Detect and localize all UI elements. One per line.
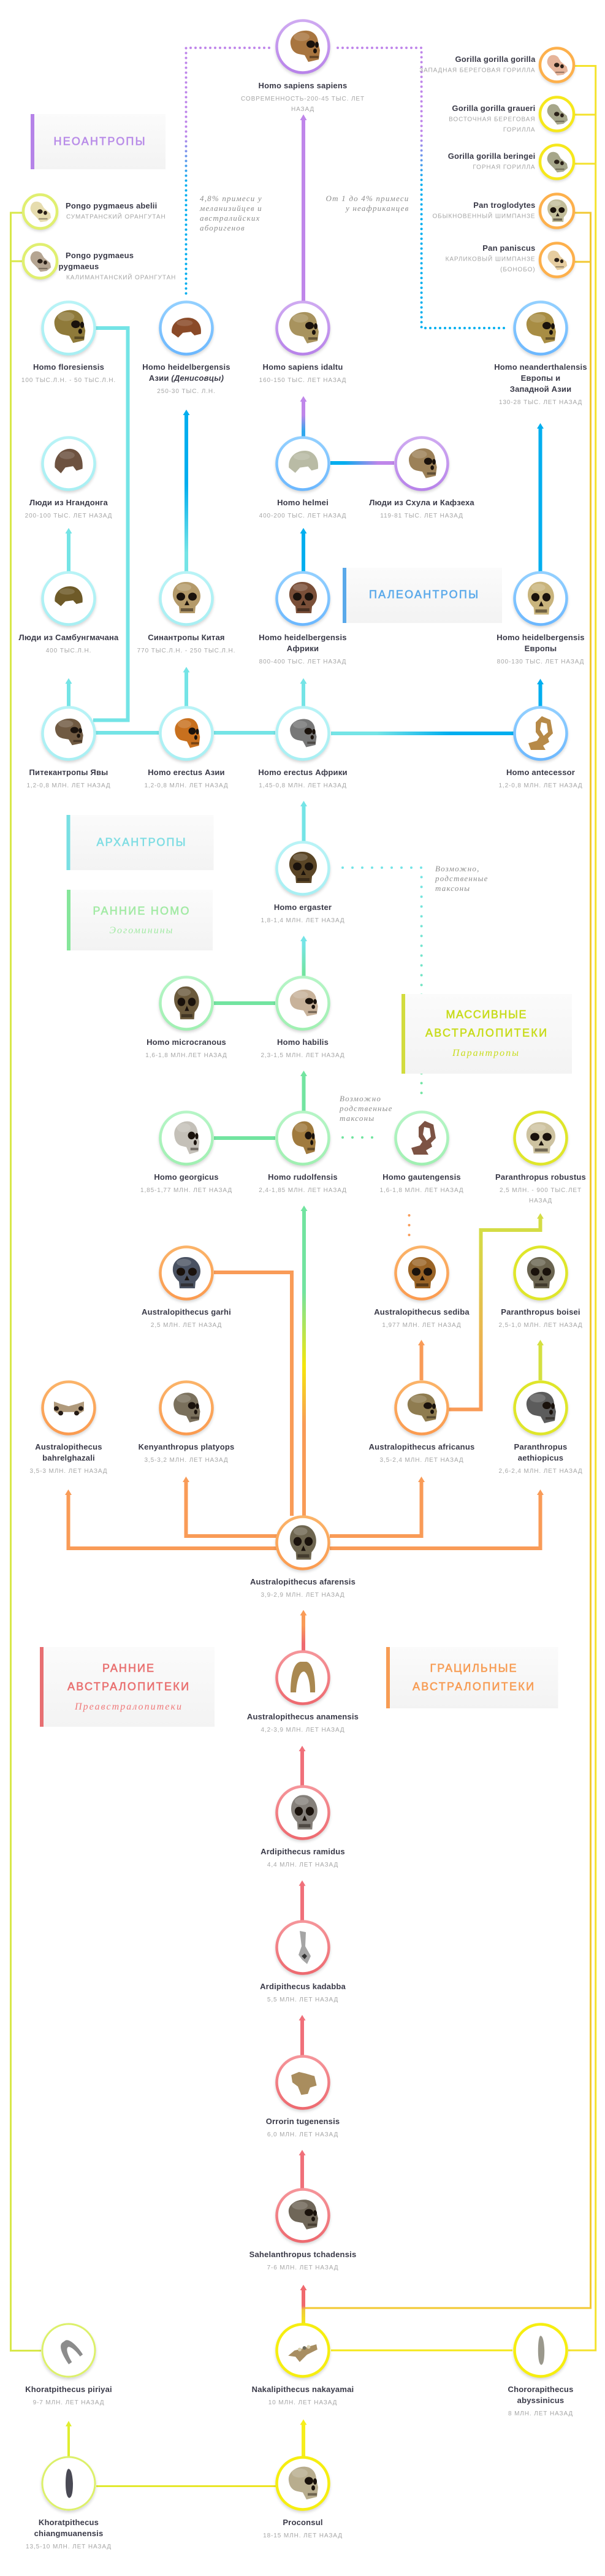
skull icon: [289, 582, 317, 613]
skull icon: [547, 152, 568, 172]
node: Khoratpithecus chiangmuanensis: [26, 2456, 112, 2550]
node: Proconsul: [263, 2456, 343, 2539]
connector: georgicus to rudolfensis: [214, 1136, 275, 1140]
date: 5,5 МЛН. ЛЕТ НАЗАД: [267, 1997, 338, 2003]
note: possibly related taxa near rudolfensis: родственные: [339, 1104, 393, 1113]
name: Australopithecus africanus: [369, 1442, 474, 1451]
connector: Java to erectus Asia: [96, 731, 159, 735]
arrow: anamensis to afarensis: [300, 1610, 306, 1651]
arrow: habilis to ergaster: [300, 936, 307, 976]
skull icon: [31, 202, 51, 222]
node: Khoratpithecus piriyai: [25, 2323, 112, 2406]
date: 1,2-0,8 МЛН. ЛЕТ НАЗАД: [144, 782, 229, 789]
name: Homo floresiensis: [33, 362, 104, 372]
name: Homo georgicus: [154, 1172, 219, 1182]
skull icon: [172, 318, 201, 337]
node: Ardipithecus ramidus: [261, 1786, 345, 1868]
skull icon: [547, 199, 568, 222]
connector: microcranous to habilis: [214, 1001, 275, 1005]
panel: early australopithecines: АВСТРАЛОПИТЕКИ: [67, 1680, 189, 1692]
arrow: sahelanthropus to orrorin: [299, 2150, 305, 2188]
name: Homo neanderthalensis: [494, 362, 587, 372]
date: НАЗАД: [529, 1198, 552, 1204]
date: 3,9-2,9 МЛН. ЛЕТ НАЗАД: [261, 1592, 345, 1599]
node: Chororapithecus abyssinicus: [508, 2323, 574, 2417]
skull icon: [291, 31, 320, 62]
name: Homo microcranous: [146, 1038, 226, 1047]
note: possibly related taxa near rudolfensis: Возможно: [340, 1094, 381, 1103]
name: Homo ergaster: [274, 903, 332, 912]
node: Homo heidelbergensis Asia: [142, 300, 230, 395]
name: Pan troglodytes: [473, 201, 536, 210]
date: 2,5 МЛН. - 900 ТЫС.ЛЕТ: [500, 1187, 582, 1194]
name: Африки: [287, 644, 319, 653]
panel: early Homo: Эогоминины: [109, 925, 173, 936]
skull icon: [527, 312, 556, 343]
name: Homo erectus Азии: [148, 768, 225, 777]
node: Paranthropus boisei: [498, 1246, 583, 1329]
node: Homo sapiens idaltu: [259, 300, 346, 384]
date: 1,6-1,8 МЛН. ЛЕТ НАЗАД: [379, 1187, 464, 1194]
arrow: idaltu to sapiens: [300, 114, 306, 301]
node: Nakalipithecus nakayamai: [252, 2323, 354, 2406]
date: 119-81 ТЫС. ЛЕТ НАЗАД: [380, 513, 463, 519]
arrow: africanus to robustus: [448, 1213, 544, 1409]
name: bahrelghazali: [42, 1453, 95, 1462]
skull icon: [408, 1257, 436, 1288]
arrow: africanus to sediba: [418, 1340, 425, 1380]
arrow: afarensis to platyops: [183, 1477, 277, 1536]
name: Gorilla gorilla gorilla: [455, 55, 536, 64]
date: КАЛИМАНТАНСКИЙ ОРАНГУТАН: [66, 273, 176, 281]
skull icon: [290, 990, 318, 1016]
name: Homo sapiens sapiens: [259, 81, 347, 90]
date: 3,5-3 МЛН. ЛЕТ НАЗАД: [30, 1468, 107, 1475]
name: Pongo pygmaeus abelii: [66, 201, 157, 210]
date: 7-6 МЛН. ЛЕТ НАЗАД: [267, 2265, 338, 2271]
name: Paranthropus boisei: [501, 1307, 580, 1317]
connector: erectus Africa to antecessor: [331, 732, 514, 735]
skull icon: [291, 1795, 318, 1830]
node: Homo neanderthalensis: [494, 300, 587, 406]
dotted line: rudolfensis to gautengensis: [343, 1136, 382, 1139]
name: Homo heidelbergensis: [259, 633, 347, 642]
name: Homo erectus Африки: [258, 768, 348, 777]
note: possibly related taxa near ergaster: Возможно,: [435, 864, 480, 873]
node: Sambungmacan people: [19, 571, 119, 654]
name: Pongo pygmaeus: [66, 251, 134, 260]
date: 770 ТЫС.Л.Н. - 250 ТЫС.Л.Н.: [137, 648, 235, 654]
arrow: erectus Asia to sinanthropus: [183, 667, 190, 706]
skull icon: [411, 1121, 436, 1155]
panel: early Homo: [67, 890, 213, 950]
note: 1 to 4% admixture: у неафриканцев: [344, 204, 409, 213]
dotted line: Denisovan admixture: [186, 48, 269, 294]
date: ГОРНАЯ ГОРИЛЛА: [473, 164, 536, 170]
skull icon: [291, 1662, 315, 1692]
name: Nakalipithecus nakayamai: [252, 2385, 354, 2394]
skull icon: [173, 582, 200, 613]
skull icon: [175, 718, 200, 748]
arrow: aethiopicus to boisei: [537, 1340, 544, 1380]
connector: erectus Asia to Africa: [214, 731, 275, 735]
node: Homo erectus Asia: [144, 706, 229, 789]
name: Homo antecessor: [506, 768, 575, 777]
name: chiangmuanensis: [34, 2529, 103, 2538]
skull icon: [31, 251, 51, 272]
connector: left orangutan line: [11, 213, 41, 2351]
name: Gorilla gorilla beringei: [448, 151, 536, 161]
date: 3,5-2,4 МЛН. ЛЕТ НАЗАД: [379, 1457, 464, 1464]
skull icon: [538, 2336, 544, 2365]
date: 200-100 ТЫС. ЛЕТ НАЗАД: [25, 513, 112, 519]
date: 160-150 ТЫС. ЛЕТ НАЗАД: [259, 377, 346, 384]
skull icon: [289, 312, 319, 343]
name: aethiopicus: [518, 1453, 563, 1462]
date: 4,2-3,9 МЛН. ЛЕТ НАЗАД: [261, 1727, 345, 1733]
name: Homo habilis: [277, 1038, 329, 1047]
skull icon: [527, 1257, 555, 1288]
dotted line: sediba to gautengensis: [408, 1206, 411, 1235]
arrow: afarensis to bahrelghazali: [65, 1489, 277, 1548]
panel: early australopithecines: Преавстралопитеки: [74, 1702, 181, 1712]
date: НАЗАД: [291, 106, 314, 113]
node: Paranthropus aethiopicus: [498, 1381, 583, 1475]
name: pygmaeus: [59, 262, 99, 271]
node: Homo habilis: [261, 976, 345, 1059]
arrow: Sambungmacan to Ngandong: [65, 528, 72, 571]
date: 400 ТЫС.Л.Н.: [46, 648, 91, 654]
node: Homo erectus Africa: [258, 706, 348, 789]
date: ЗАПАДНАЯ БЕРЕГОВАЯ ГОРИЛЛА: [419, 67, 536, 74]
date: 10 МЛН. ЛЕТ НАЗАД: [268, 2399, 337, 2406]
panel: archanthropes: [66, 815, 213, 870]
panel: early Homo: РАННИЕ HOMO: [93, 905, 189, 917]
name: Западной Азии: [510, 384, 571, 394]
panel: robust australopithecines: [401, 994, 572, 1074]
skull icon: [290, 719, 316, 747]
name: Синантропы Китая: [148, 633, 225, 642]
name: Homo rudolfensis: [268, 1172, 338, 1182]
node: Kenyanthropus platyops: [139, 1381, 234, 1464]
panel: paleoanthropes: ПАЛЕОАНТРОПЫ: [369, 589, 478, 601]
node: Java Pithecanthropus: [26, 706, 111, 789]
arrow: rudolfensis to habilis: [300, 1071, 307, 1111]
panel: gracile australopithecines: ГРАЦИЛЬНЫЕ: [430, 1662, 516, 1674]
date: 2,6-2,4 МЛН. ЛЕТ НАЗАД: [498, 1468, 583, 1475]
name: Sahelanthropus tchadensis: [249, 2250, 356, 2259]
name: Kenyanthropus platyops: [139, 1442, 234, 1451]
connector: chimpanzee line: [305, 213, 591, 2308]
skull icon: [289, 2467, 318, 2499]
date: ГОРИЛЛА: [503, 126, 536, 134]
arrow: proconsul to nakalipithecus: [300, 2420, 306, 2456]
connector: nakalipithecus to chororapithecus: [331, 2350, 512, 2351]
name: Homo heidelbergensis: [142, 362, 230, 372]
node: Gorilla gorilla beringei: [448, 144, 575, 180]
node: Australopithecus afarensis: [250, 1516, 356, 1599]
date: (БОНОБО): [500, 266, 536, 273]
name: Orrorin tugenensis: [266, 2117, 340, 2126]
node: Gorilla gorilla gorilla: [419, 47, 575, 83]
date: 1,6-1,8 МЛН.ЛЕТ НАЗАД: [145, 1052, 227, 1059]
node: Ardipithecus kadabba: [260, 1921, 346, 2003]
note: 1 to 4% admixture: От 1 до 4% примеси: [326, 194, 409, 203]
skull icon: [290, 1525, 316, 1560]
name: Homo gautengensis: [382, 1172, 461, 1182]
name: Khoratpithecus: [39, 2518, 99, 2527]
name: Ardipithecus kadabba: [260, 1982, 346, 1991]
note: possibly related taxa near ergaster: родственные: [435, 874, 489, 883]
date: СОВРЕМЕННОСТЬ-200-45 ТЫС. ЛЕТ: [241, 96, 365, 102]
date: 2,3-1,5 МЛН. ЛЕТ НАЗАД: [261, 1052, 345, 1059]
panel: robust australopithecines: АВСТРАЛОПИТЕКИ: [425, 1026, 547, 1039]
arrow: kadabba to ramidus: [299, 1880, 305, 1921]
node: Australopithecus sediba: [374, 1246, 470, 1329]
dotted line: ergaster relatives: [343, 868, 422, 1101]
date: 250-30 ТЫС. Л.Н.: [157, 388, 216, 395]
node: Orrorin tugenensis: [266, 2055, 340, 2138]
name: Homo helmei: [277, 498, 329, 507]
panel: robust australopithecines: Парантропы: [452, 1048, 519, 1058]
date: 400-200 ТЫС. ЛЕТ НАЗАД: [259, 513, 346, 519]
date: 13,5-10 МЛН. ЛЕТ НАЗАД: [26, 2544, 112, 2550]
node: Homo antecessor: [498, 706, 583, 789]
date: 1,45-0,8 МЛН. ЛЕТ НАЗАД: [259, 782, 347, 789]
skull icon: [527, 1122, 555, 1153]
node: Homo helmei: [259, 437, 346, 519]
skull icon: [289, 852, 317, 883]
node: Homo floresiensis: [21, 300, 116, 384]
node: Homo heidelbergensis Africa: [259, 571, 347, 665]
node: Homo gautengensis: [379, 1111, 464, 1194]
arrow: helmei to idaltu: [300, 396, 306, 437]
skull icon: [173, 1257, 200, 1288]
skull icon: [527, 1392, 556, 1423]
name: Australopithecus afarensis: [250, 1577, 356, 1586]
connector: gorilla line: [568, 66, 596, 2350]
arrow: Java to Sambungmacan: [65, 678, 72, 706]
name: Pan paniscus: [482, 243, 536, 253]
date: ОБЫКНОВЕННЫЙ ШИМПАНЗЕ: [433, 212, 536, 220]
note: possibly related taxa near rudolfensis: таксоны: [340, 1114, 375, 1123]
skull icon: [528, 716, 553, 750]
dotted line: Neanderthal admixture: [338, 48, 505, 328]
name: Homo heidelbergensis: [497, 633, 585, 642]
connector: Pithecanthropus to floresiensis: [93, 328, 127, 720]
node: Pan troglodytes: [433, 193, 575, 229]
skull icon: [528, 582, 554, 614]
panel: archanthropes: АРХАНТРОПЫ: [97, 836, 185, 849]
date: 8 МЛН. ЛЕТ НАЗАД: [508, 2410, 573, 2417]
note: 4.8% admixture: австралийских: [200, 213, 261, 223]
skull icon: [547, 104, 568, 124]
skull icon: [55, 719, 83, 745]
date: 18-15 МЛН. ЛЕТ НАЗАД: [263, 2532, 343, 2539]
date: СУМАТРАНСКИЙ ОРАНГУТАН: [66, 212, 166, 221]
name: Australopithecus sediba: [374, 1307, 470, 1317]
skull icon: [56, 2337, 83, 2364]
node: Sahelanthropus tchadensis: [249, 2188, 356, 2271]
node: Homo microcranous: [145, 976, 227, 1059]
arrow: ergaster to erectus Africa: [300, 801, 307, 841]
node: Pan paniscus: [446, 242, 575, 278]
date: 1,8-1,4 МЛН. ЛЕТ НАЗАД: [261, 917, 345, 924]
name: Paranthropus: [514, 1442, 567, 1451]
arrow: chiangmuanensis to piriyai: [66, 2421, 72, 2456]
panel: early australopithecines: РАННИЕ: [102, 1662, 154, 1674]
arrow: afarensis to africanus: [330, 1477, 425, 1536]
panel: paleoanthropes: [343, 568, 502, 623]
node: Homo ergaster: [261, 841, 345, 924]
name: Люди из Схула и Кафзеха: [369, 498, 474, 507]
date: 1,977 МЛН. ЛЕТ НАЗАД: [382, 1322, 462, 1329]
date: 100 ТЫС.Л.Н. - 50 ТЫС.Л.Н.: [21, 377, 116, 384]
date: 2,4-1,85 МЛН. ЛЕТ НАЗАД: [259, 1187, 347, 1194]
skull icon: [174, 1122, 199, 1154]
arrow: erectus Africa to heidelbergensis Africa: [300, 678, 306, 706]
skull icon: [66, 2469, 73, 2498]
date: 800-400 ТЫС. ЛЕТ НАЗАД: [259, 659, 346, 665]
note: 4.8% admixture: 4,8% примеси у: [200, 194, 262, 203]
name: Европы и: [521, 373, 560, 383]
node: Homo sapiens sapiens: [241, 20, 365, 113]
arrow: afarensis to aethiopicus: [330, 1489, 544, 1548]
date: 800-130 ТЫС. ЛЕТ НАЗАД: [497, 659, 584, 665]
date: 4,4 МЛН. ЛЕТ НАЗАД: [267, 1862, 338, 1868]
date: 1,2-0,8 МЛН. ЛЕТ НАЗАД: [498, 782, 583, 789]
node: Homo heidelbergensis Europe: [497, 571, 585, 665]
name: Australopithecus: [35, 1442, 102, 1451]
note: 4.8% admixture: меланизийцев и: [199, 204, 262, 213]
node: Homo rudolfensis: [259, 1111, 347, 1194]
arrow: nakalipithecus to sahelanthropus: [300, 2285, 306, 2323]
name: Australopithecus garhi: [142, 1307, 231, 1317]
name: Proconsul: [283, 2518, 323, 2527]
skull icon: [299, 1931, 311, 1964]
arrow: heidelbergensis Africa to helmei: [300, 528, 306, 571]
date: 3,5-3,2 МЛН. ЛЕТ НАЗАД: [144, 1457, 229, 1464]
connector: garhi: [214, 1272, 292, 1516]
skull icon: [547, 55, 568, 75]
skull icon: [289, 2200, 318, 2230]
name: abyssinicus: [517, 2396, 564, 2405]
node: Australopithecus garhi: [142, 1246, 231, 1329]
panel: robust australopithecines: МАССИВНЫЕ: [446, 1008, 526, 1020]
date: ВОСТОЧНАЯ БЕРЕГОВАЯ: [449, 117, 536, 123]
node: Australopithecus africanus: [369, 1381, 474, 1464]
skull icon: [291, 2072, 317, 2095]
date: КАРЛИКОВЫЙ ШИМПАНЗЕ: [446, 255, 536, 262]
node: Australopithecus bahrelghazali: [30, 1381, 107, 1475]
name: Paranthropus robustus: [495, 1172, 586, 1182]
note: possibly related taxa near ergaster: таксоны: [435, 884, 470, 893]
skull icon: [548, 251, 567, 270]
name: Люди из Нгандонга: [29, 498, 108, 507]
skull icon: [55, 310, 85, 343]
skull icon: [173, 1393, 200, 1423]
name: Ardipithecus ramidus: [261, 1847, 345, 1856]
skull icon: [288, 2344, 318, 2362]
name: Gorilla gorilla graueri: [452, 104, 536, 113]
name: Азии (Денисовцы): [149, 373, 224, 383]
name: Khoratpithecus piriyai: [25, 2385, 112, 2394]
panel: early australopithecines: [40, 1647, 215, 1727]
skull icon: [408, 1394, 437, 1421]
arrow: ramidus to anamensis: [299, 1746, 305, 1786]
skull icon: [55, 586, 83, 606]
skull icon: [54, 1402, 84, 1415]
date: 1,2-0,8 МЛН. ЛЕТ НАЗАД: [26, 782, 111, 789]
arrow: sinanthropus to Denisovans: [183, 410, 190, 571]
node: Skhul and Qafzeh people: [369, 437, 474, 519]
name: Homo sapiens idaltu: [263, 362, 343, 372]
date: 130-28 ТЫС. ЛЕТ НАЗАД: [499, 399, 582, 406]
arrow: antecessor to heidelbergensis Europe: [537, 679, 544, 706]
node: Paranthropus robustus: [495, 1111, 586, 1204]
connector: chiangmuanensis to proconsul: [96, 2485, 276, 2487]
name: Европы: [525, 644, 557, 653]
note: 4.8% admixture: аборигенов: [200, 223, 245, 232]
name: Australopithecus anamensis: [247, 1712, 359, 1721]
panel: neoanthropes: [31, 114, 166, 169]
skull icon: [409, 448, 437, 478]
date: 6,0 МЛН. ЛЕТ НАЗАД: [267, 2131, 338, 2138]
name: Люди из Самбунгмачана: [19, 633, 119, 642]
node: Ngandong people: [25, 437, 112, 519]
panel: gracile australopithecines: [386, 1647, 558, 1708]
name: Питекантропы Явы: [29, 768, 108, 777]
date: 9-7 МЛН. ЛЕТ НАЗАД: [33, 2399, 104, 2406]
arrow: orrorin to kadabba: [299, 2015, 305, 2055]
node: Australopithecus anamensis: [247, 1651, 359, 1733]
panel: gracile australopithecines: АВСТРАЛОПИТЕКИ: [413, 1680, 534, 1692]
skull icon: [289, 451, 318, 473]
node: Pongo pygmaeus pygmaeus: [22, 243, 176, 281]
arrow: heidelbergensis Europe to Neanderthals: [537, 423, 544, 571]
name: Chororapithecus: [508, 2385, 574, 2394]
node: Sinanthropus of China: [137, 571, 235, 654]
skull icon: [174, 987, 199, 1019]
node: Pongo pygmaeus abelii: [22, 194, 166, 229]
node: Homo georgicus: [140, 1111, 232, 1194]
date: 2,5 МЛН. ЛЕТ НАЗАД: [151, 1322, 222, 1329]
arrow: afarensis to rudolfensis: [300, 1206, 308, 1516]
date: 1,85-1,77 МЛН. ЛЕТ НАЗАД: [140, 1187, 232, 1194]
connector: helmei to Skhul: [330, 461, 394, 465]
skull icon: [55, 449, 83, 473]
panel: neoanthropes: НЕОАНТРОПЫ: [54, 135, 145, 147]
node: Gorilla gorilla graueri: [449, 96, 575, 134]
skull icon: [292, 1122, 316, 1154]
date: 2,5-1,0 МЛН. ЛЕТ НАЗАД: [498, 1322, 583, 1329]
